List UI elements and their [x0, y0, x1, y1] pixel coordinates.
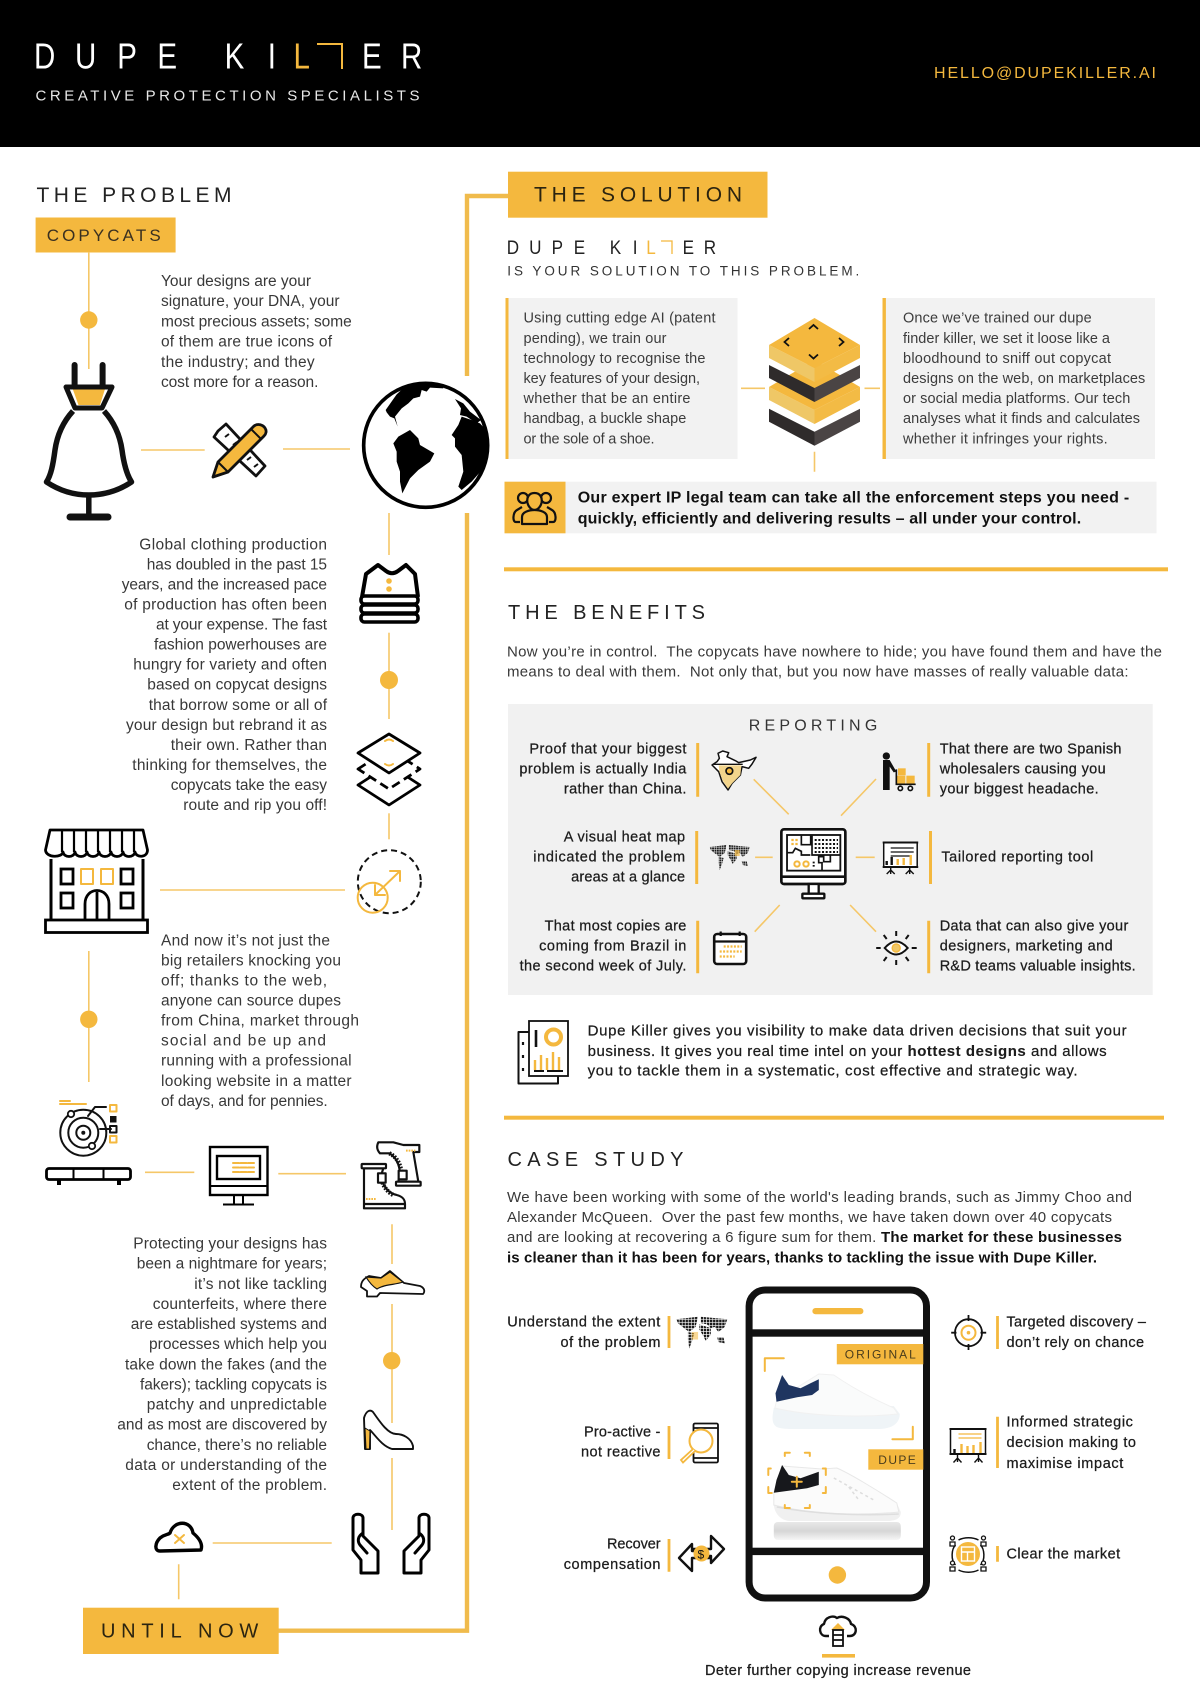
label: recover compensation: Recover — [607, 1537, 661, 1553]
text: your designs: Your designs are your — [161, 273, 311, 290]
text: now it's not just big retailers — [161, 932, 359, 1110]
shoe: original — [773, 1374, 900, 1429]
text: protecting your designs — [117, 1236, 327, 1494]
tag: dupe: DUPE — [878, 1453, 916, 1467]
small logo wordmark: DUPE — [507, 237, 585, 258]
item: insights: designers, marketing and — [940, 939, 1113, 955]
text: your designs: signature, your DNA, your — [161, 293, 340, 310]
tag: copycats: COPYCATS — [47, 226, 161, 245]
label: understand the extent: of the problem — [560, 1335, 660, 1351]
panel: dupe finder: finder killer, we set it loose like a — [903, 331, 1111, 347]
item: heat map: indicated the problem — [533, 849, 685, 865]
item: India: problem is actually India — [519, 761, 687, 777]
text: visibility statement: business. It gives you real time intel on your hottest designs and allows — [588, 1043, 1107, 1060]
subheading: IS YOUR SOLUTION TO THIS PROBLEM. — [507, 264, 859, 279]
small logo wordmark: L — [646, 237, 656, 258]
text: case study intro: Alexander McQueen. Over the past few months, we have taken down over 40 copycats — [507, 1209, 1112, 1226]
tag: dupe — [868, 1449, 923, 1470]
text: protecting your designs: chance, there’s no reliable — [147, 1437, 327, 1454]
scan brackets: dupe — [768, 1453, 826, 1508]
text: case study intro: We have been working with some of the world's leading brands, such as Jimmy Choo and — [507, 1189, 1132, 1206]
label: targeted discovery — [1006, 1315, 1147, 1351]
text: protecting your designs: been a nightmare for years; — [137, 1256, 327, 1273]
heading: the problem: THE PROBLEM — [36, 184, 232, 207]
shoe: dupe — [774, 1465, 901, 1540]
text: protecting your designs: are established systems and — [131, 1316, 327, 1333]
icon: presentation board — [883, 842, 918, 874]
icon: brogue shoe — [361, 1271, 424, 1296]
text: global clothing production: copycats take the easy — [171, 777, 327, 794]
label: informed decision making: Informed strategic — [1006, 1415, 1133, 1431]
label: targeted discovery: don’t rely on chance — [1006, 1335, 1144, 1351]
panel: dupe finder: whether it infringes your rights. — [902, 431, 1108, 447]
icon: cloud with cross — [156, 1523, 202, 1551]
item: insights: R&D teams valuable insights. — [940, 959, 1136, 975]
icon: report document — [518, 1021, 568, 1084]
logo wordmark: L — [294, 36, 310, 76]
tag: original: ORIGINAL — [845, 1347, 916, 1361]
icon: money exchange — [679, 1536, 724, 1571]
label: pro-active: not reactive — [581, 1445, 660, 1461]
icon: calendar — [714, 932, 746, 964]
icon: globe — [364, 382, 488, 507]
icon: boots — [362, 1142, 421, 1208]
text: case study intro — [507, 1189, 1132, 1266]
text: now it's not just big retailers: social and be up and — [161, 1032, 326, 1050]
text: global clothing production: fashion powerhouses are — [154, 637, 327, 654]
icon: storefront — [46, 830, 148, 932]
icon: high heel — [364, 1411, 413, 1449]
logo wordmark: DUPE — [34, 36, 177, 76]
label: recover compensation — [564, 1537, 661, 1573]
item: heat map — [533, 830, 685, 885]
text: visibility statement: you to tackle them in a systematic, cost effective and strategic way. — [588, 1063, 1078, 1080]
text: now you're in control — [507, 644, 1162, 680]
timeline on left — [80, 951, 98, 1082]
text: global clothing production: route and rip you off! — [183, 797, 327, 814]
text: global clothing production: years, and the increased pace — [122, 576, 327, 593]
icon: dress — [46, 365, 132, 517]
icon: dashed circle with arrow — [358, 850, 421, 913]
item: India: Proof that your biggest — [529, 741, 686, 757]
icon: India map — [712, 751, 756, 790]
logo wordmark: ER — [362, 36, 422, 76]
text: your designs — [161, 273, 352, 391]
text: global clothing production: based on copycat designs — [147, 677, 327, 694]
text: protecting your designs: processes which help you — [149, 1336, 327, 1353]
text: case study intro: is cleaner than it has been for years, thanks to tackling the issue with Dupe Killer. — [507, 1250, 1097, 1266]
item: Brazil: coming from Brazil in — [539, 939, 686, 955]
text: protecting your designs: and as most are discovered by — [117, 1417, 327, 1434]
timeline beside text — [380, 633, 398, 719]
text: your designs: most precious assets; some — [161, 313, 352, 330]
logo wordmark: KI — [225, 36, 276, 76]
text: now it's not just big retailers: And now it’s not just the — [161, 932, 330, 950]
panel: dupe finder: or social media platforms. Our tech — [903, 391, 1130, 407]
label: informed decision making: maximise impact — [1006, 1456, 1123, 1472]
phone speaker — [812, 1308, 863, 1314]
item: tailored reporting tool: Tailored reporting tool — [941, 849, 1093, 865]
panel: AI training: or the sole of a shoe. — [524, 431, 654, 447]
text: visibility statement — [588, 1023, 1127, 1080]
text: global clothing production: hungry for variety and often — [133, 657, 327, 674]
panel: dupe finder: Once we’ve trained our dupe — [903, 311, 1092, 327]
text: global clothing production: thinking for themselves, the — [132, 757, 327, 774]
tagline: CREATIVE PROTECTION SPECIALISTS — [36, 88, 420, 105]
icon: open hands — [353, 1514, 429, 1573]
text: protecting your designs: data or understanding of the — [125, 1457, 327, 1474]
text: now you're in control: Now you’re in control. The copycats have nowhere to hide; you have found them and have the — [507, 644, 1162, 660]
text: protecting your designs: counterfeits, where there — [153, 1296, 327, 1313]
tag: copycats — [36, 218, 176, 252]
text: protecting your designs: it’s not like tackling — [194, 1276, 327, 1293]
text: global clothing production: has doubled in the past 15 — [147, 556, 327, 573]
tag: until now: UNTIL NOW — [101, 1621, 258, 1643]
icon: cloud upload — [820, 1617, 856, 1646]
icon: layered stack — [769, 318, 860, 446]
icon: dotted world map — [676, 1317, 727, 1348]
icon: eye — [876, 931, 917, 965]
icon: desktop monitor — [210, 1147, 268, 1204]
yellow separators — [697, 743, 930, 973]
panel: AI training: whether that be an entire — [522, 391, 690, 407]
tag: the solution: THE SOLUTION — [534, 184, 742, 207]
panel: dupe finder: bloodhound to sniff out copycat — [903, 351, 1111, 367]
logo inverted T mark — [317, 44, 342, 69]
callout: IP legal team: Our expert IP legal team can take all the enforcement steps you need - — [578, 490, 1129, 507]
text: protecting your designs: take down the fakes (and the — [125, 1356, 327, 1373]
label: pro-active — [581, 1425, 661, 1461]
text: global clothing production: that borrow some or all of — [149, 697, 328, 714]
icon: money exchange: $ — [698, 1548, 704, 1562]
tag: until now — [83, 1608, 279, 1654]
heading: the benefits: THE BENEFITS — [508, 602, 705, 624]
tag: original — [837, 1344, 923, 1364]
heading: case study: CASE STUDY — [508, 1149, 684, 1171]
icon: central monitor — [781, 829, 845, 898]
text: now it's not just big retailers: looking website in a matter — [161, 1073, 352, 1090]
item: India: rather than China. — [564, 781, 686, 797]
text: protecting your designs: Protecting your designs has — [133, 1236, 327, 1252]
text: now it's not just big retailers: running with a professional — [161, 1053, 352, 1070]
panel: AI training: handbag, a buckle shape — [524, 411, 686, 427]
text: your designs: the industry; and they — [161, 354, 315, 371]
callout: IP legal team — [504, 482, 1156, 533]
item: heat map: A visual heat map — [564, 830, 685, 846]
label: understand the extent — [507, 1315, 660, 1351]
text: global clothing production: your design but rebrand it as — [126, 717, 327, 734]
text: now it's not just big retailers: off; thanks to the web, — [161, 972, 327, 990]
panel: reporting — [508, 704, 1153, 995]
panel: dupe finder: designs on the web, on marketplaces — [903, 371, 1145, 387]
text: now it's not just big retailers: anyone can source dupes — [161, 992, 341, 1010]
text: now it's not just big retailers: of days, and for pennies. — [161, 1093, 328, 1110]
small logo wordmark — [507, 237, 716, 258]
icon: radar scale — [46, 1101, 130, 1185]
phone home button — [829, 1566, 846, 1584]
icon: person with trolley — [883, 752, 916, 790]
callout: IP legal team: quickly, efficiently and delivering results – all under your control. — [578, 510, 1081, 527]
text: protecting your designs: patchy and unpredictable — [147, 1397, 327, 1414]
reporting contents — [519, 718, 1136, 975]
divider — [504, 567, 1168, 571]
icon: dotted world map — [710, 845, 750, 870]
separators — [669, 1316, 998, 1572]
text: protecting your designs: fakers); tackling copycats is — [140, 1376, 327, 1394]
timeline from copycats to dress — [80, 252, 98, 369]
text: global clothing production: Global clothing production — [139, 536, 327, 553]
label: clear the market: Clear the market — [1006, 1547, 1120, 1563]
item: Brazil — [520, 919, 686, 975]
item: Spanish wholesalers: wholesalers causing you — [939, 761, 1106, 777]
text: your designs: cost more for a reason. — [161, 374, 318, 391]
main solution connector line — [278, 196, 508, 1631]
tag: the solution — [508, 172, 768, 218]
panel: AI training — [506, 298, 738, 459]
icon: pencil and ruler — [213, 424, 266, 477]
text: global clothing production: their own. Rather than — [171, 737, 327, 754]
icon: phone with magnifier — [681, 1424, 718, 1462]
label: targeted discovery: Targeted discovery – — [1006, 1315, 1147, 1331]
text: now it's not just big retailers: big retailers knocking you — [161, 952, 341, 970]
icon: legal team — [513, 493, 556, 524]
reporting heading: REPORTING — [749, 718, 877, 735]
connector below globe to sweater — [388, 513, 390, 555]
text: visibility statement: Dupe Killer gives you visibility to make data driven decisions that suit your — [588, 1023, 1127, 1040]
logo wordmark — [34, 36, 422, 76]
label: informed decision making — [1006, 1415, 1136, 1472]
icon: sweater stack — [361, 565, 418, 622]
header band — [0, 0, 1200, 147]
panel: AI training: technology to recognise the — [524, 351, 706, 367]
icon: target — [951, 1315, 986, 1350]
panel: dupe finder — [882, 298, 1155, 459]
text: now you're in control: means to deal with them. Not only that, but you now have masses of really valuable data: — [507, 664, 1128, 680]
icon: presentation board — [950, 1429, 986, 1462]
connector lines — [754, 779, 876, 932]
text: case study intro: and are looking at recovering a 6 figure sum for them. The market for these businesses — [507, 1229, 1122, 1246]
panel: AI training: key features of your design, — [524, 371, 700, 387]
panel: AI training: pending), we train our — [524, 331, 667, 347]
label: understand the extent: Understand the extent — [507, 1315, 660, 1331]
item: Brazil: That most copies are — [545, 919, 686, 935]
text: global clothing production — [122, 536, 328, 814]
label: recover compensation: compensation — [564, 1557, 660, 1573]
item: Spanish wholesalers: your biggest headache. — [940, 781, 1099, 797]
panel: dupe finder: analyses what it finds and calculates — [903, 411, 1140, 427]
label: informed decision making: decision making to — [1006, 1435, 1136, 1451]
icon: layers — [358, 734, 420, 805]
item: insights — [940, 919, 1136, 975]
text: your designs: of them are true icons of — [161, 334, 333, 351]
connectors around pencil icon — [141, 449, 350, 450]
text: protecting your designs: extent of the problem. — [172, 1477, 327, 1494]
phone mockup — [749, 1290, 926, 1598]
item: India — [519, 741, 687, 797]
label: deter further copying: Deter further copying increase revenue — [705, 1663, 971, 1679]
item: insights: Data that can also give your — [940, 919, 1128, 935]
text: global clothing production: of production has often been — [124, 596, 327, 614]
item: Spanish wholesalers — [939, 741, 1122, 797]
small logo wordmark: KI — [610, 237, 637, 258]
timeline dot — [383, 1352, 400, 1369]
divider — [504, 1116, 1164, 1120]
contact email: HELLO@DUPEKILLER.AI — [934, 65, 1156, 82]
label: pro-active: Pro-active - — [584, 1425, 661, 1441]
text: now it's not just big retailers: from China, market through — [161, 1012, 359, 1030]
scan brackets: original — [765, 1358, 913, 1439]
icon: market cycle — [950, 1536, 986, 1572]
item: heat map: areas at a glance — [571, 869, 685, 885]
item: Brazil: the second week of July. — [520, 959, 686, 975]
underline below cloud — [822, 1654, 855, 1658]
text: global clothing production: at your expense. The fast — [156, 616, 328, 634]
panel: AI training: Using cutting edge AI (patent — [524, 311, 716, 327]
small logo wordmark: ER — [683, 237, 716, 258]
item: Spanish wholesalers: That there are two Spanish — [940, 741, 1122, 757]
